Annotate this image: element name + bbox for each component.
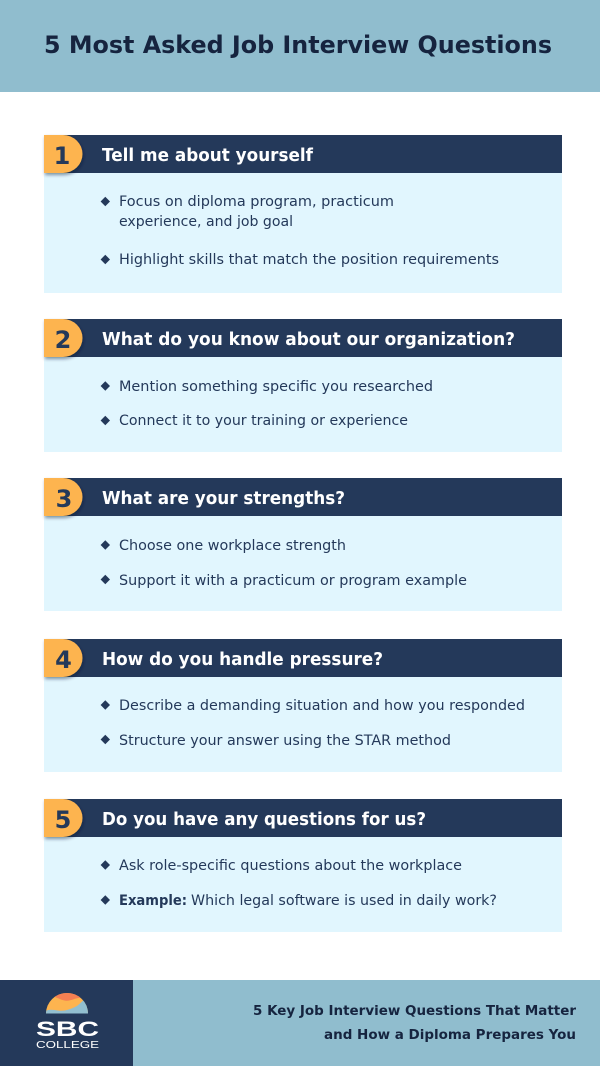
bullet text: Connect it to your training or experience: [119, 413, 408, 429]
bullet icon: [101, 381, 110, 391]
title banner: [0, 0, 600, 92]
logo panel: [0, 980, 133, 1066]
panel: question 3: [44, 478, 562, 611]
panel: question 5: [44, 799, 562, 932]
logo wordmark: SBC: [36, 1018, 99, 1041]
panel: question 2: [44, 319, 562, 452]
icon: SBC sun logo: [46, 993, 88, 1014]
bullet icon: [101, 860, 110, 870]
footer text line 1: 5 Key Job Interview Questions That Matter: [253, 1004, 577, 1019]
logo subtext: COLLEGE: [36, 1039, 99, 1051]
number badge 3: [44, 478, 82, 516]
bullet text with bold label: Which legal software is used in daily work?: [191, 893, 497, 909]
bullet text: Describe a demanding situation and how you responded: [119, 698, 525, 714]
heading 2: What do you know about our organization?: [102, 329, 515, 350]
bullet text: Ask role-specific questions about the workplace: [119, 858, 462, 874]
number badge 3: 3: [56, 485, 72, 513]
bullet icon: [101, 575, 110, 584]
heading 3: What are your strengths?: [102, 488, 345, 509]
number badge 5: 5: [55, 806, 71, 834]
bullet icon: [101, 540, 110, 550]
bullet text with bold label: Example:: [119, 893, 187, 909]
heading 5: Do you have any questions for us?: [102, 809, 426, 830]
bullet text: Mention something specific you researched: [119, 379, 433, 395]
bullet text: Support it with a practicum or program example: [119, 573, 467, 589]
panel: question 1: [44, 135, 562, 293]
number badge 2: [44, 319, 82, 357]
bullet icon: [101, 416, 110, 425]
footer text line 2: and How a Diploma Prepares You: [324, 1028, 576, 1043]
number badge 2: 2: [55, 326, 71, 354]
number badge 1: [44, 135, 82, 173]
panel: question 4: [44, 639, 562, 772]
bullet icon: [101, 700, 110, 710]
bullet text: Focus on diploma program, practicum: [119, 194, 394, 210]
heading 1: Tell me about yourself: [102, 145, 313, 166]
number badge 4: [44, 639, 82, 677]
footer: [0, 980, 600, 1066]
number badge 1: 1: [54, 142, 70, 170]
bullet icon: [101, 255, 110, 264]
number badge 4: 4: [55, 646, 72, 674]
number badge 5: [44, 799, 82, 837]
bullet text: Structure your answer using the STAR method: [119, 733, 451, 749]
bullet text: Choose one workplace strength: [119, 538, 346, 554]
bullet text: Highlight skills that match the position requirements: [119, 252, 499, 268]
bullet icon: [101, 197, 110, 206]
bullet icon: [101, 895, 110, 905]
bullet icon: [101, 735, 110, 744]
bullet text continued: experience, and job goal: [119, 214, 293, 230]
heading 4: How do you handle pressure?: [102, 649, 383, 670]
title: 5 Most Asked Job Interview Questions: [44, 31, 552, 59]
